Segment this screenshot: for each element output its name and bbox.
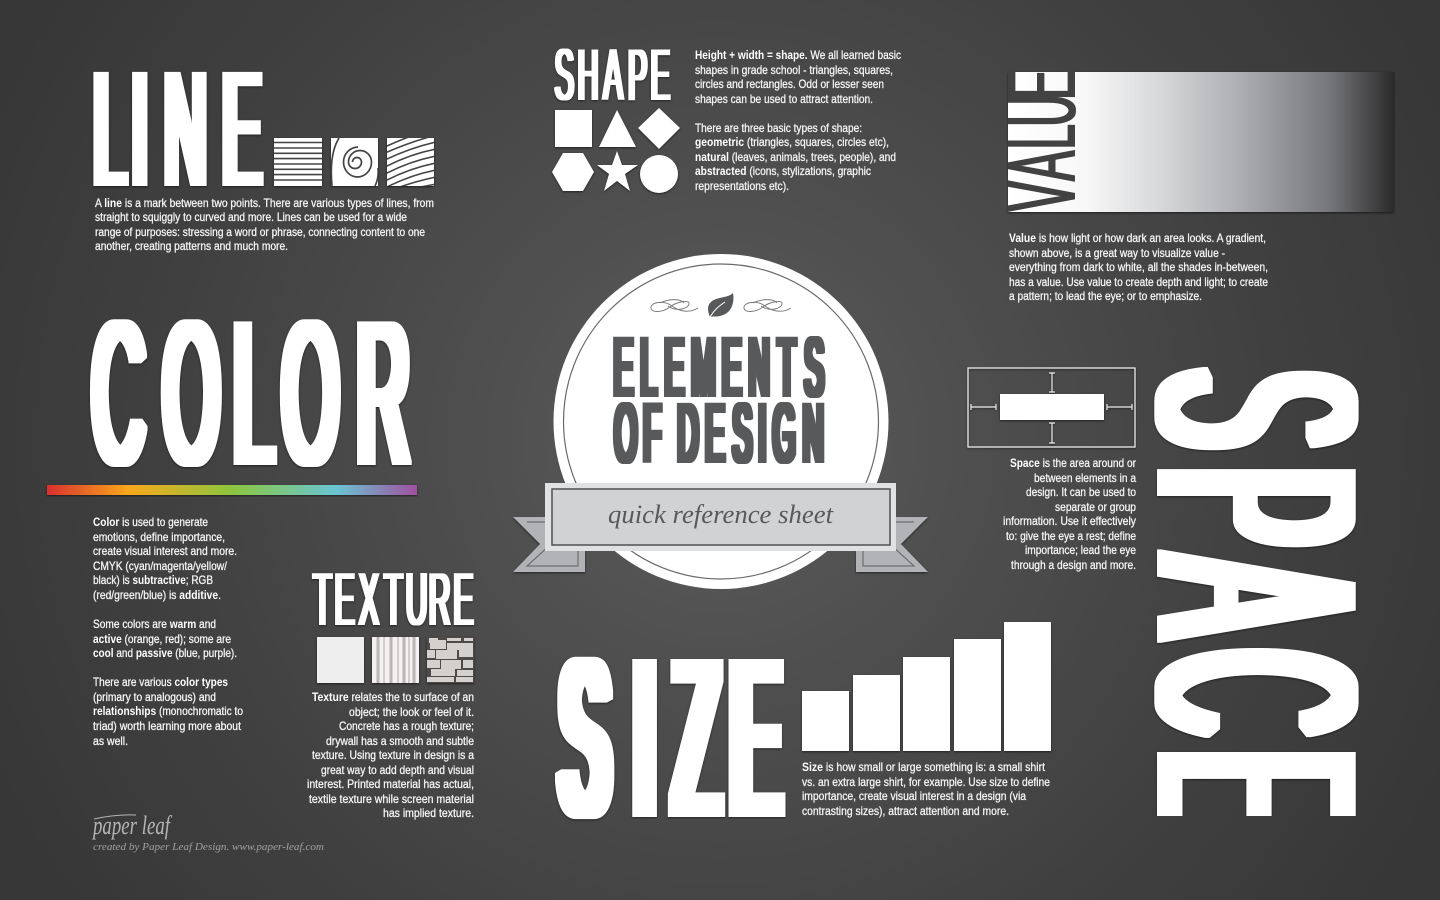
text: line description: A line is a mark between two points. There are various types of lines, from	[95, 196, 434, 210]
text: shape description: representations etc).	[695, 179, 789, 193]
ribbon tails	[513, 517, 928, 572]
text: space description	[1003, 456, 1136, 572]
text: value description	[1009, 231, 1268, 303]
panel: shape	[552, 34, 901, 193]
text: texture description: has implied texture.	[383, 806, 474, 820]
text: shape description: There are three basic types of shape:	[695, 121, 862, 135]
text: shape description: shapes can be used to attract attention.	[695, 92, 873, 106]
text: value description: shown above, is a great way to visualize value -	[1009, 246, 1225, 260]
text: space description: information. Use it effectively	[1003, 514, 1136, 528]
heading: COLOR: COLOR	[92, 280, 409, 507]
text: color description: relationships (monochromatic to	[93, 704, 243, 718]
text: space description: importance; lead the eye	[1025, 543, 1136, 557]
text: color description: active (orange, red); some are	[93, 632, 231, 646]
icon: right flourish	[744, 300, 791, 312]
text: texture description: Texture relates the to surface of an	[312, 690, 474, 704]
text: shape description: circles and rectangles. Odd or lesser seen	[695, 77, 884, 91]
text: value description: a pattern; to lead the eye; or to emphasize.	[1009, 289, 1202, 303]
text: color description	[93, 515, 243, 748]
text: color description: Color is used to generate	[93, 515, 208, 529]
panel: space	[966, 367, 1360, 816]
text: color description: CMYK (cyan/magenta/yellow/	[93, 559, 228, 573]
text: space description: to: give the eye a rest; define	[1006, 529, 1136, 543]
ribbon: quick reference sheet: quick reference sheet	[608, 500, 834, 529]
text: color description: create visual interest and more.	[93, 544, 237, 558]
text: shape description: shapes in grade school - triangles, squares,	[695, 63, 893, 77]
heading: SIZE: SIZE	[561, 617, 780, 860]
text: color description: cool and passive (blue, purple).	[93, 646, 237, 660]
text: size description: importance, create visual interest in a design (via	[802, 789, 1026, 803]
icon: paper texture	[317, 637, 364, 683]
text: shape description: geometric (triangles, squares, circles etc),	[695, 135, 889, 149]
heading: SHAPE: SHAPE	[555, 34, 670, 116]
text: color description: Some colors are warm and	[93, 617, 216, 631]
text: space description: through a design and more.	[1011, 558, 1136, 572]
text: value description: everything from dark to white, all the shades in-between,	[1009, 260, 1268, 274]
icon: shape samples	[552, 108, 680, 193]
text: shape description: natural (leaves, animals, trees, people), and	[695, 150, 896, 164]
text: texture description: great way to add depth and visual	[321, 763, 474, 777]
icon: wood texture	[372, 637, 419, 683]
diagram: spacing around an element	[968, 368, 1135, 447]
icon: line samples	[273, 138, 435, 188]
ribbon: quick reference sheet	[545, 483, 896, 551]
text: credit line: created by Paper Leaf Design. www.paper-leaf.com	[93, 841, 324, 853]
icon: leaf	[708, 293, 733, 317]
text: texture description: texture. Using texture in design is a	[312, 748, 474, 762]
heading: TEXTURE: TEXTURE	[313, 558, 473, 642]
text: line description: another, creating patterns and much more.	[95, 239, 288, 253]
footer: credit	[92, 811, 324, 853]
heading: VALUE: VALUE	[989, 70, 1097, 211]
text: color description: triad) worth learning more about	[93, 719, 242, 733]
text: space description: separate or group	[1055, 500, 1136, 514]
text: size description	[802, 760, 1050, 818]
text: texture description: drywall has a smooth and subtle	[326, 734, 474, 748]
gradient bar	[1008, 72, 1394, 212]
text: line description: range of purposes: stressing a word or phrase, connecting content to one	[95, 225, 425, 239]
text: color description: (primary to analogous) and	[93, 690, 216, 704]
text: color description: emotions, define importance,	[93, 530, 225, 544]
text: color description: There are various color types	[93, 675, 228, 689]
text: size description: Size is how small or large something is: a small shirt	[802, 760, 1046, 774]
panel: line	[92, 72, 435, 253]
badge circle	[554, 254, 888, 589]
text: space description: Space is the area around or	[1010, 456, 1136, 470]
panel: color	[47, 280, 417, 748]
panel: value	[989, 70, 1394, 303]
title: ELEMENTS OF DESIGN: ELEMENTS	[614, 322, 824, 412]
text: color description: as well.	[93, 734, 128, 748]
text: size description: contrasting sizes), attract attention and more.	[802, 804, 1009, 818]
text: value description: has a value. Use value to create depth and light; to create	[1009, 275, 1268, 289]
bar chart: growing sizes	[802, 622, 1051, 751]
text: texture description: textile texture while screen material	[309, 792, 474, 806]
text: texture description	[307, 690, 474, 820]
panel: size	[561, 617, 1051, 860]
text: shape description: Height + width = shape. We all learned basic	[695, 48, 901, 62]
text: shape description	[695, 48, 901, 193]
text: space description: between elements in a	[1034, 471, 1136, 485]
text: value description: Value is how light or how dark an area looks. A gradient,	[1009, 231, 1266, 245]
title: ELEMENTS OF DESIGN	[614, 322, 824, 478]
text: color description: (red/green/blue) is additive.	[93, 588, 221, 602]
logo: paper leaf: paper leaf	[92, 811, 173, 840]
heading: SPACE: SPACE	[1099, 370, 1415, 828]
heading: LINE: LINE	[94, 37, 261, 220]
text: texture description: Concrete has a rough texture;	[339, 719, 474, 733]
text: color description: black) is subtractive; RGB	[93, 573, 213, 587]
text: line description	[95, 196, 434, 253]
icon: brick texture	[427, 637, 474, 683]
colour spectrum bar	[47, 485, 417, 495]
text: texture description: interest. Printed material has actual,	[307, 777, 474, 791]
title: ELEMENTS OF DESIGN: OF DESIGN	[614, 388, 824, 478]
text: size description: vs. an extra large shirt, for example. Use size to define	[802, 775, 1050, 789]
panel: texture	[307, 558, 474, 820]
text: line description: straight to squiggly to curved and more. Lines can be used for a wide	[95, 210, 407, 224]
text: texture description: object; the look or feel of it.	[349, 705, 474, 719]
text: shape description: abstracted (icons, stylizations, graphic	[695, 164, 871, 178]
badge: elements of design	[513, 254, 928, 589]
icon: left flourish	[651, 300, 698, 312]
text: space description: design. It can be used to	[1026, 485, 1136, 499]
